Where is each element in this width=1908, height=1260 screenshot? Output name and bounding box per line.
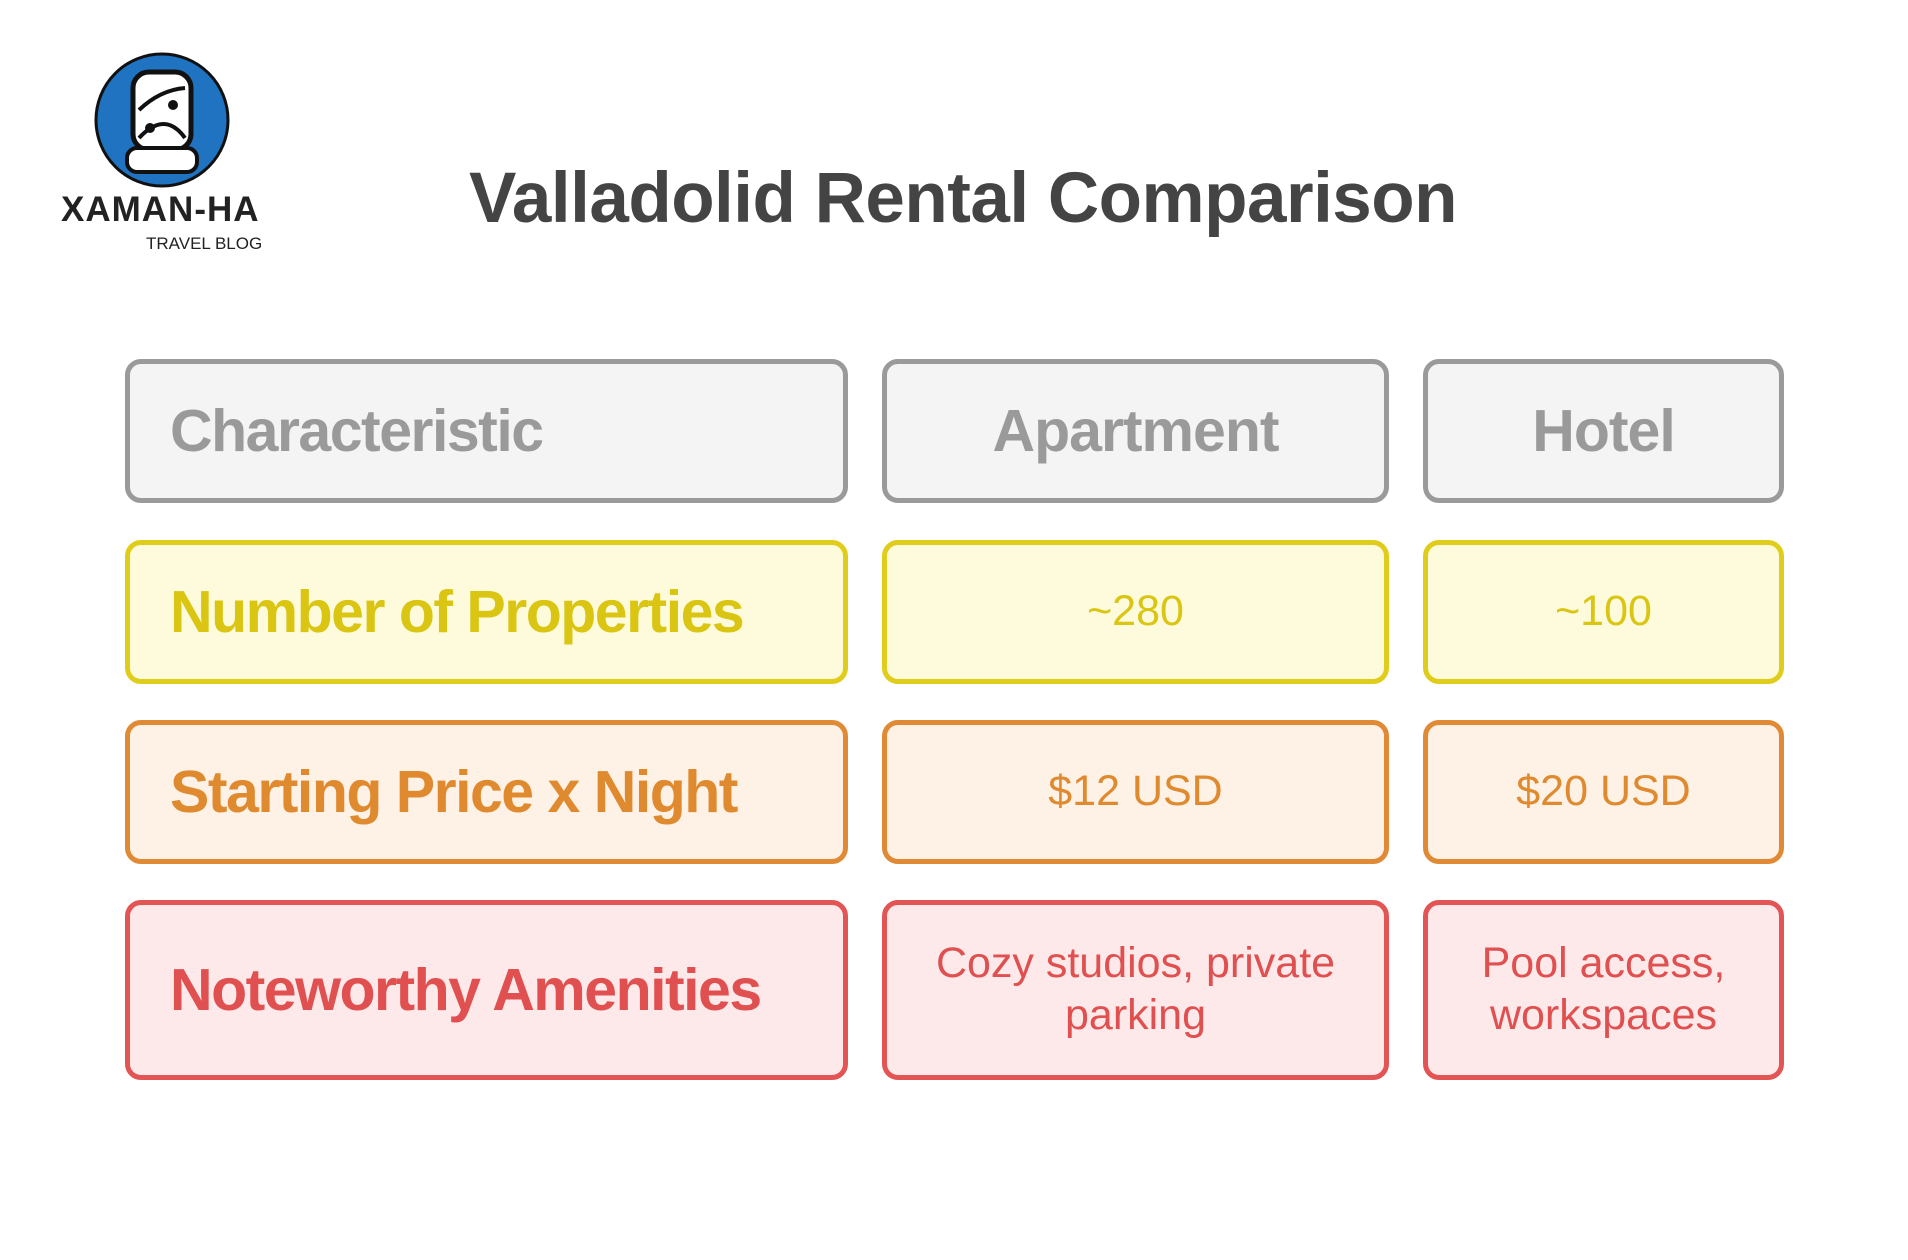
logo [61, 52, 262, 253]
header: Hotel: Hotel [1532, 398, 1675, 464]
row: number of properties [125, 540, 1784, 684]
header row [125, 359, 1784, 503]
apartment value: ~280 [1087, 587, 1184, 635]
apartment value [882, 540, 1389, 684]
header: Apartment [882, 359, 1389, 503]
label: Noteworthy Amenities [170, 957, 761, 1023]
label: Starting Price x Night [170, 759, 737, 825]
header: Characteristic: Characteristic [170, 398, 543, 464]
apartment value [882, 720, 1389, 864]
hotel value: $20 USD [1516, 767, 1691, 815]
apartment value: $12 USD [1048, 767, 1223, 815]
header: Hotel [1423, 359, 1784, 503]
icon: mayan glyph [94, 52, 230, 188]
hotel value [1423, 900, 1784, 1080]
label [125, 540, 848, 684]
header: Apartment: Apartment [992, 398, 1279, 464]
apartment value [882, 900, 1389, 1080]
label [125, 900, 848, 1080]
apartment value: Cozy studios, private [936, 939, 1335, 987]
title: Valladolid Rental Comparison [469, 159, 1457, 238]
apartment value: parking [1065, 991, 1206, 1039]
hotel value: ~100 [1555, 587, 1652, 635]
label [125, 720, 848, 864]
hotel value: workspaces [1490, 991, 1717, 1039]
header: Characteristic [125, 359, 848, 503]
hotel value [1423, 720, 1784, 864]
logo: TRAVEL BLOG [146, 234, 262, 253]
hotel value [1423, 540, 1784, 684]
label: Number of Properties [170, 579, 743, 645]
row: amenities [125, 900, 1784, 1080]
hotel value: Pool access, [1482, 939, 1725, 987]
row: starting price [125, 720, 1784, 864]
logo text: XAMAN-HA [61, 190, 260, 229]
